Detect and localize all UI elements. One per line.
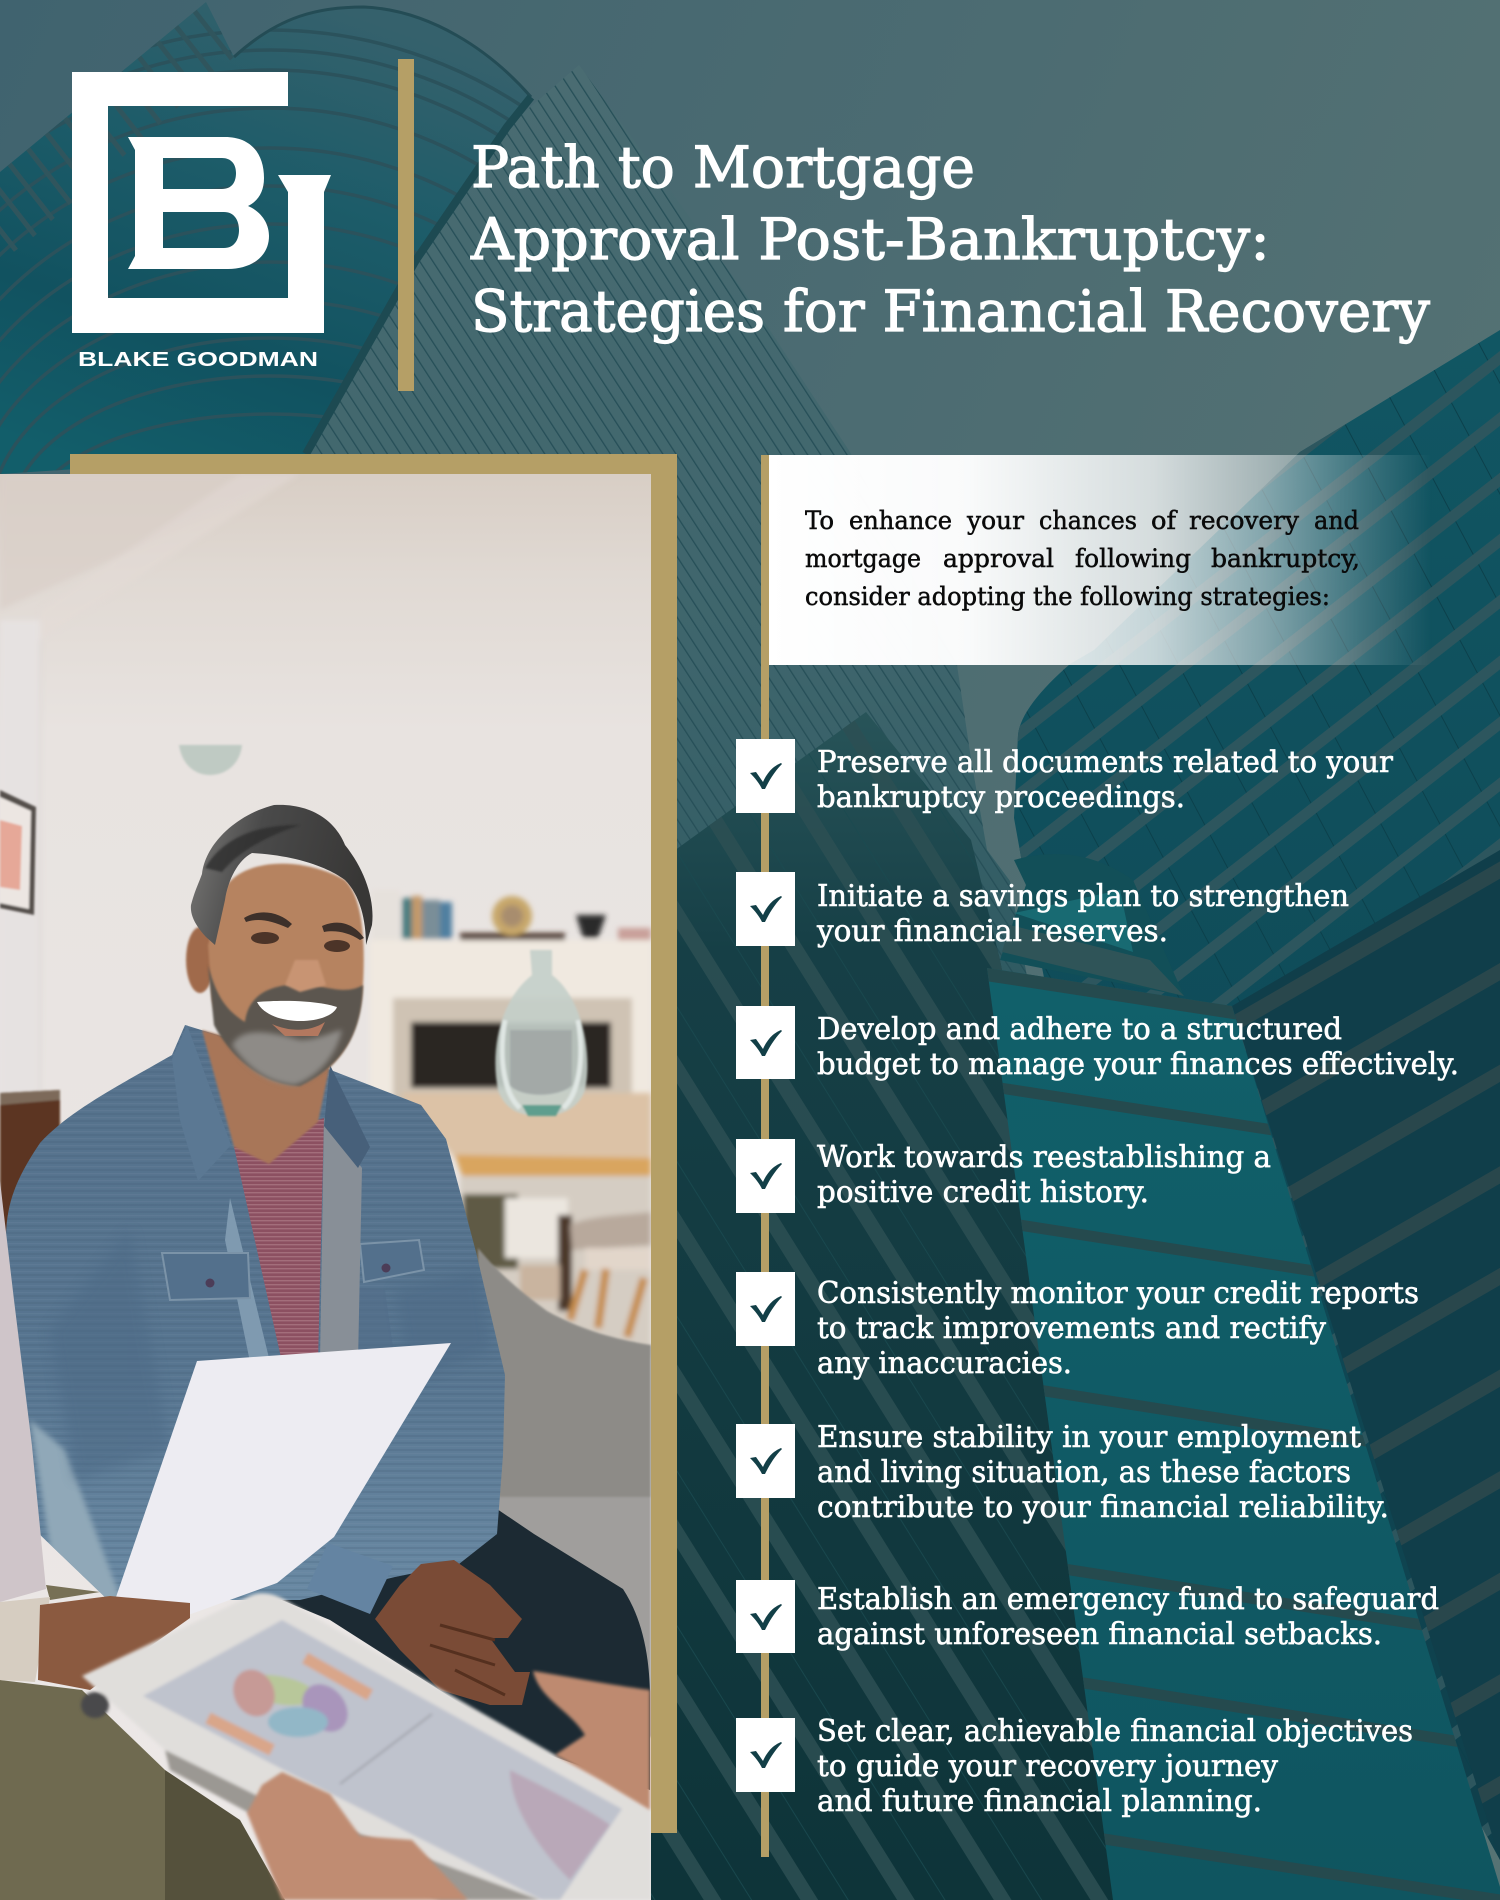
- strategy 3: [736, 1006, 1459, 1081]
- glass vase: [495, 950, 587, 1116]
- wall picture: [0, 790, 36, 915]
- sofa: [476, 1248, 651, 1738]
- tablet: [81, 1593, 651, 1900]
- man: clasped hands: [375, 1560, 530, 1705]
- document: [115, 1343, 451, 1614]
- intro text: your: [966, 506, 1025, 536]
- hand: bottom: [247, 1772, 468, 1900]
- intro text: chances: [1039, 506, 1137, 536]
- man: face: [186, 805, 373, 1086]
- intro text: To: [805, 506, 834, 536]
- man: shirt: [0, 1020, 520, 1620]
- gold timeline: [761, 455, 769, 1857]
- intro text: [805, 506, 1360, 612]
- intro panel: [769, 455, 1432, 665]
- strategy 2: your financial reserves.: [816, 914, 1168, 948]
- strategy 6: [736, 1420, 1389, 1524]
- intro text: recovery: [1189, 506, 1300, 536]
- intro text: and: [1314, 506, 1359, 536]
- man: neck: [202, 1030, 330, 1164]
- strategy 1: bankruptcy proceedings.: [817, 780, 1185, 814]
- strategy 8: and future financial planning.: [817, 1784, 1262, 1818]
- strategy 1: Preserve all documents related to your: [817, 745, 1394, 779]
- intro text: following: [1075, 544, 1191, 574]
- shelf and fireplace: [370, 890, 651, 1103]
- intro text: consider adopting the following strategies:: [805, 582, 1330, 612]
- title: [470, 134, 1430, 345]
- intro text: approval: [943, 544, 1054, 574]
- strategy 3: budget to manage your finances effectively.: [817, 1047, 1459, 1081]
- strategy 2: Initiate a savings plan to strengthen: [817, 879, 1349, 913]
- intro text: enhance: [849, 506, 952, 536]
- strategy 5: any inaccuracies.: [817, 1346, 1072, 1380]
- gold photo frame: [70, 454, 677, 1833]
- logo: Blake Goodman: [72, 72, 331, 371]
- hand: right: [533, 1671, 650, 1810]
- strategy 7: against unforeseen financial setbacks.: [817, 1617, 1382, 1651]
- intro text: of: [1151, 506, 1178, 536]
- strategy 5: to track improvements and rectify: [817, 1311, 1326, 1345]
- strategy 3: Develop and adhere to a structured: [817, 1012, 1342, 1046]
- woman: sleeve: [0, 1181, 46, 1602]
- wall lamp: [179, 745, 242, 775]
- strategy 8: Set clear, achievable financial objectives: [817, 1714, 1413, 1748]
- strategy 8: [736, 1714, 1413, 1818]
- strategy 6: contribute to your financial reliability.: [817, 1490, 1389, 1524]
- man: collar: [172, 1025, 231, 1181]
- cabinet: [0, 1088, 62, 1234]
- strategy 2: [736, 872, 1349, 948]
- strategy 4: Work towards reestablishing a: [817, 1140, 1271, 1174]
- title: Path to Mortgage: [471, 134, 975, 201]
- man: t-shirt: [234, 1118, 324, 1362]
- strategy 7: [736, 1580, 1439, 1653]
- man: jeans: [260, 1509, 650, 1790]
- strategy 4: positive credit history.: [817, 1175, 1149, 1209]
- strategy 5: Consistently monitor your credit reports: [817, 1276, 1419, 1310]
- title: Strategies for Financial Recovery: [471, 278, 1430, 345]
- woman: pants: [0, 1680, 165, 1900]
- strategy 6: Ensure stability in your employment: [817, 1420, 1361, 1454]
- logo wordmark: BLAKE GOODMAN: [78, 349, 318, 371]
- intro text: mortgage: [805, 544, 921, 574]
- table and chairs: [400, 1093, 651, 1356]
- man: shirt cuff: [307, 1543, 393, 1614]
- title: Approval Post-Bankruptcy:: [470, 206, 1270, 273]
- woman: hand: [38, 1596, 190, 1690]
- gold divider: [398, 59, 414, 391]
- strategy 1: [736, 739, 1394, 814]
- strategy 4: [736, 1139, 1271, 1213]
- photo: smiling man with document and tablet: [0, 474, 651, 1900]
- strategy 7: Establish an emergency fund to safeguard: [817, 1582, 1439, 1616]
- strategy 5: [736, 1272, 1419, 1380]
- woman: cuff: [0, 1597, 50, 1682]
- strategy 8: to guide your recovery journey: [817, 1749, 1278, 1783]
- intro text: bankruptcy,: [1211, 544, 1360, 574]
- strategy 6: and living situation, as these factors: [817, 1455, 1351, 1489]
- man: shirt placket: [320, 1118, 362, 1362]
